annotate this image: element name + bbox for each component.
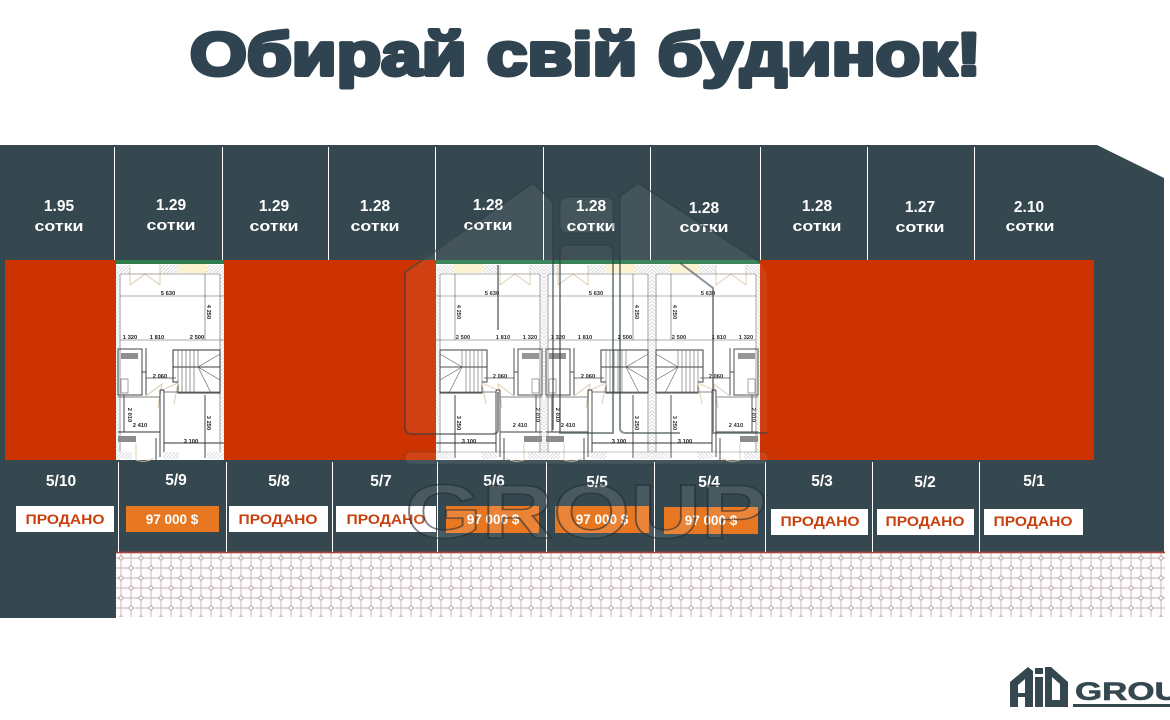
dimensions: house 5/5: 3 100 xyxy=(612,439,626,445)
plot area 1.28 second xyxy=(464,197,512,234)
house 5/2 sold: 5/2 xyxy=(914,474,936,491)
logo: letter A xyxy=(1010,667,1033,707)
dimensions: house 5/9: 3 100 xyxy=(184,439,198,445)
dimensions: house 5/6: 4 250 xyxy=(455,305,461,319)
plot area 1.27 xyxy=(896,199,944,236)
dimensions: house 5/4: 3 100 xyxy=(678,439,692,445)
plot area 1.28 third: 1.28 xyxy=(576,198,606,215)
house 5/10 sold: 5/10 xyxy=(46,473,76,490)
watermark: logo base bar xyxy=(405,452,768,464)
dimensions: house 5/5 xyxy=(551,291,639,445)
plot area 1.95: 1.95 xyxy=(44,198,74,215)
plot area 1.29: сотки xyxy=(146,217,196,234)
dimensions: house 5/4: 1 320 xyxy=(739,335,753,341)
dimensions: house 5/6: 2 010 xyxy=(534,408,540,422)
house numbers and status row xyxy=(16,472,1083,535)
dimensions: house 5/9 xyxy=(123,291,211,445)
house 5/10 sold: ПРОДАНО xyxy=(26,512,104,527)
dimensions: house 5/4: 2 410 xyxy=(729,423,743,429)
dimensions: house 5/5: 2 410 xyxy=(561,423,575,429)
red sold block band xyxy=(5,260,1094,460)
watermark: GROUP word: GROUP xyxy=(405,470,767,555)
house 5/8 sold: ПРОДАНО xyxy=(238,512,318,527)
house 5/7 sold: 5/7 xyxy=(370,473,392,490)
plot area 1.28 fourth: 1.28 xyxy=(689,200,719,217)
house 5/1 sold: ПРОДАНО xyxy=(994,514,1072,529)
dimensions: house 5/5: 1 320 xyxy=(551,335,565,341)
house 5/6 price: 97 000 $ xyxy=(467,512,520,527)
plot area 2.10 xyxy=(1006,199,1054,235)
house 5/9 price xyxy=(126,472,219,532)
floor plan: house 5/5 xyxy=(544,260,652,461)
plot area 1.29: 1.29 xyxy=(156,197,186,214)
watermark: house D xyxy=(620,183,767,434)
house 5/4 price: 97 000 $ xyxy=(685,513,738,528)
plot area 1.28 fourth xyxy=(680,200,728,236)
dimensions: house 5/4 xyxy=(671,291,756,445)
dimensions: house 5/6: 2 060 xyxy=(493,374,507,380)
plot area 1.28 third: сотки xyxy=(566,218,616,235)
house 5/5 price xyxy=(555,474,649,533)
house 5/3 sold: ПРОДАНО xyxy=(780,514,860,529)
dimensions: house 5/6: 2 410 xyxy=(513,423,527,429)
dimensions: house 5/4: 2 060 xyxy=(709,374,723,380)
dimensions: house 5/4: 4 250 xyxy=(671,305,677,319)
house 5/1 sold: 5/1 xyxy=(1023,473,1045,490)
house 5/9 price: 5/9 xyxy=(165,472,187,489)
dimensions: house 5/9: 5 630 xyxy=(161,291,175,297)
plot area 1.28 first: 1.28 xyxy=(360,198,390,215)
plot area 1.29 xyxy=(146,197,196,234)
plot area 1.29 second: 1.29 xyxy=(259,198,289,215)
paving strip xyxy=(116,552,1165,617)
house 5/9 price: 97 000 $ xyxy=(146,512,199,527)
house 5/5 price: 97 000 $ xyxy=(576,512,629,527)
house 5/7 sold xyxy=(336,473,436,532)
dimensions: house 5/9: 2 410 xyxy=(133,423,147,429)
dimensions: house 5/4: 3 250 xyxy=(671,416,677,430)
plot area 1.28 fifth xyxy=(792,198,842,235)
plot areas row xyxy=(34,197,1054,236)
dimensions: house 5/6: 3 100 xyxy=(462,439,476,445)
plot area 1.28 first xyxy=(350,198,400,235)
house 5/4 price: 5/4 xyxy=(698,474,720,491)
plot area 2.10: сотки xyxy=(1006,218,1054,235)
dimensions: house 5/9: 1 810 xyxy=(150,335,164,341)
floor plan: house 5/4 xyxy=(652,260,760,461)
dimensions: house 5/9: 4 250 xyxy=(205,305,211,319)
plot area 1.28 second: 1.28 xyxy=(473,197,503,214)
plot area 1.28 third xyxy=(566,198,616,235)
house 5/1 sold xyxy=(984,473,1083,535)
house 5/7 sold: ПРОДАНО xyxy=(346,512,426,527)
dimensions: house 5/4: 2 010 xyxy=(750,408,756,422)
house 5/8 sold xyxy=(229,473,328,532)
house 5/6 price: 5/6 xyxy=(483,473,505,490)
dimensions: house 5/5: 3 250 xyxy=(633,416,639,430)
plot area 1.27: 1.27 xyxy=(905,199,935,216)
dimensions: house 5/9: 2 060 xyxy=(153,374,167,380)
plot area 1.29 second: сотки xyxy=(250,218,298,235)
house 5/5 price: 5/5 xyxy=(586,474,608,491)
title: Обирай свій будинок! xyxy=(190,21,981,88)
plot area 1.29 second xyxy=(250,198,298,235)
plot area 1.28 fourth: сотки xyxy=(680,219,728,236)
watermark: house D outline xyxy=(620,183,767,433)
plot area 1.28 second: сотки xyxy=(464,217,512,234)
dimensions: house 5/5: 2 060 xyxy=(581,374,595,380)
watermark: company logo xyxy=(405,183,768,555)
plot area 1.95 xyxy=(34,198,84,235)
plot area 1.28 fifth: сотки xyxy=(792,218,842,235)
dimensions: house 5/6: 1 320 xyxy=(523,335,537,341)
watermark: letter I body xyxy=(560,245,613,433)
panel: house row background xyxy=(0,145,1164,618)
dimensions: house 5/4: 1 810 xyxy=(712,335,726,341)
dimensions: house 5/6 xyxy=(455,291,540,445)
logo: letter D xyxy=(1045,667,1068,707)
house 5/4 price xyxy=(664,474,758,534)
dimensions: house 5/6: 1 810 xyxy=(496,335,510,341)
dimensions: house 5/5: 5 630 xyxy=(589,291,603,297)
plot area 1.28 first: сотки xyxy=(350,218,400,235)
house 5/6 price xyxy=(446,473,539,533)
house 5/10 sold xyxy=(16,473,114,532)
logo: underline xyxy=(1073,704,1170,707)
logo: GROUP word: GROUP xyxy=(1075,678,1170,706)
plot area 2.10: 2.10 xyxy=(1014,199,1044,216)
dimensions: house 5/4: 2 500 xyxy=(672,335,686,341)
watermark: house A xyxy=(405,183,553,434)
house 5/8 sold: 5/8 xyxy=(268,473,290,490)
logo: AID GROUP xyxy=(1010,667,1170,707)
dimensions: house 5/6: 2 500 xyxy=(456,335,470,341)
dimensions: house 5/5: 4 250 xyxy=(633,305,639,319)
plot area 1.28 fifth: 1.28 xyxy=(802,198,832,215)
dimensions: house 5/4: 5 630 xyxy=(701,291,715,297)
floor plan: house 5/9 xyxy=(116,260,224,461)
house 5/3 sold: 5/3 xyxy=(811,473,833,490)
plot area 1.27: сотки xyxy=(896,219,944,236)
dimensions: house 5/6: 3 250 xyxy=(455,416,461,430)
dimensions: house 5/9: 3 250 xyxy=(205,416,211,430)
dimensions: house 5/5: 1 810 xyxy=(578,335,592,341)
dimensions: house 5/9: 2 500 xyxy=(190,335,204,341)
house 5/3 sold xyxy=(771,473,868,535)
house 5/2 sold: ПРОДАНО xyxy=(886,514,964,529)
dimensions: house 5/6: 5 630 xyxy=(485,291,499,297)
watermark: house A outline xyxy=(405,183,553,434)
watermark: letter I dot xyxy=(560,197,613,233)
dimensions: house 5/5: 2 500 xyxy=(618,335,632,341)
floor plan: house 5/6 xyxy=(436,260,544,461)
dimensions: house 5/9: 2 010 xyxy=(126,408,132,422)
dimensions: house 5/5: 2 010 xyxy=(554,408,560,422)
house 5/2 sold xyxy=(877,474,974,535)
dimensions: house 5/9: 1 320 xyxy=(123,335,137,341)
logo: letter I xyxy=(1035,668,1043,707)
plot area 1.95: сотки xyxy=(34,218,84,235)
